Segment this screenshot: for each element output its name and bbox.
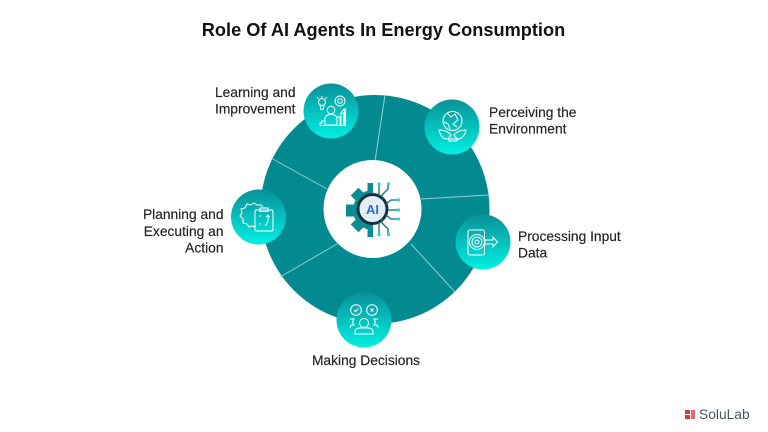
label: perceiving the environment: Environment [489, 122, 567, 136]
label: planning and executing an action: Executing an [144, 224, 224, 239]
title: Role Of AI Agents In Energy Consumption [202, 20, 565, 40]
label: making decisions: Making Decisions [312, 353, 420, 368]
icon: AI gear chip: AI [366, 202, 379, 217]
icon: AI gear chip [346, 182, 400, 237]
icon: planning and executing [231, 190, 286, 244]
icon: making decisions [336, 292, 392, 348]
label: processing input data: Data [518, 246, 547, 260]
icon: processing input data [456, 214, 510, 270]
icon: learning and improvement [304, 84, 358, 138]
label: perceiving the environment: Perceiving the [489, 105, 577, 120]
icon: perceiving the environment [424, 100, 480, 154]
donut diagram [260, 95, 490, 324]
label: learning and improvement: Improvement [215, 102, 296, 116]
logo: SoluLab: SoluLab [699, 407, 750, 422]
label: learning and improvement: Learning and [215, 85, 296, 100]
label: processing input data: Processing Input [518, 229, 621, 244]
label: planning and executing an action: Action [185, 240, 224, 256]
label: planning and executing an action: Planning and [143, 207, 224, 222]
